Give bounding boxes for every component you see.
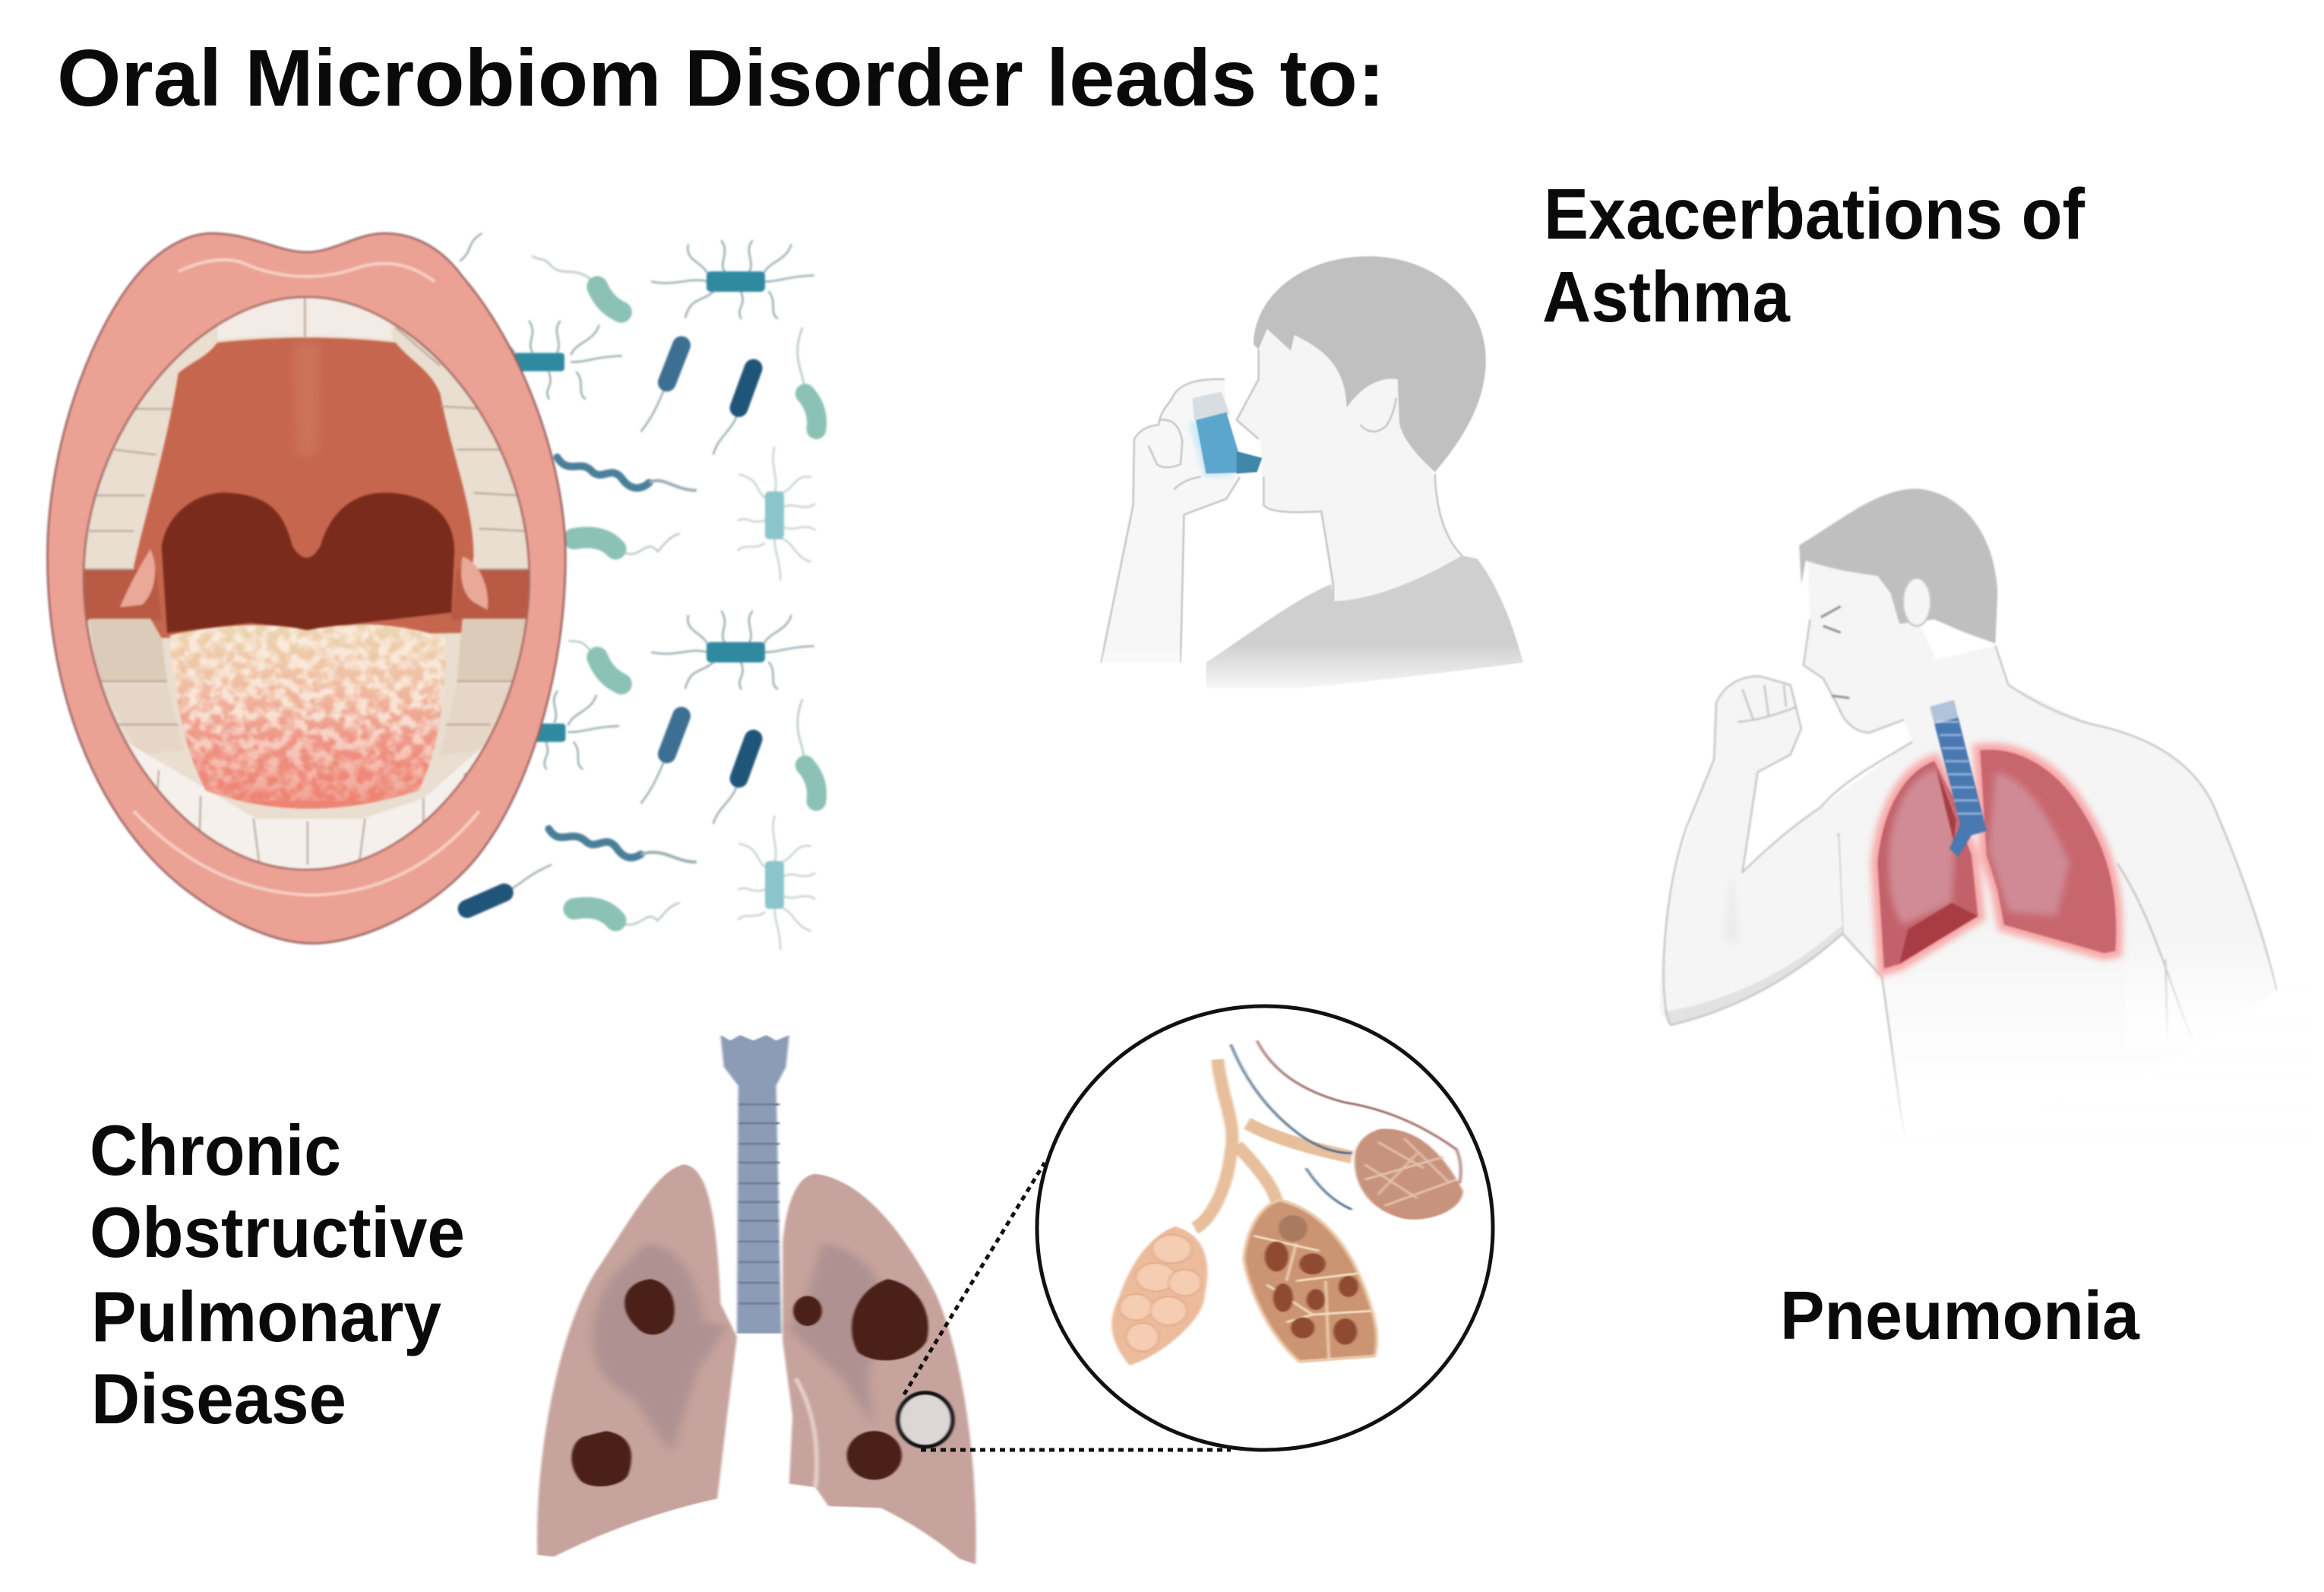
tongue bbox=[170, 625, 446, 809]
alveolar bubbles bbox=[1153, 1235, 1191, 1263]
heading: chronic obstructive pulmonary disease: Pulmonary bbox=[91, 1277, 441, 1356]
hair bbox=[1799, 489, 1997, 644]
cell contents bbox=[1265, 1215, 1358, 1345]
illustration: open mouth with oral bacteria bbox=[47, 233, 817, 949]
fade at bottom of figure bbox=[1877, 1038, 2313, 1147]
mouth interior bbox=[78, 292, 535, 872]
diseased alveolar sac bbox=[1244, 1200, 1377, 1362]
magnifier circle bbox=[1037, 1006, 1493, 1450]
heading: pneumonia: Pneumonia bbox=[1780, 1278, 2140, 1354]
tonsils bbox=[120, 549, 155, 607]
heading: exacerbations of asthma: Asthma bbox=[1542, 257, 1791, 337]
torso bbox=[1743, 646, 2277, 1134]
upper and lower teeth base bbox=[84, 298, 529, 820]
magnified spot bbox=[898, 1393, 953, 1447]
lower molars bbox=[89, 619, 167, 682]
tongue pink wash bbox=[182, 694, 441, 802]
dotted connector lines bbox=[904, 1163, 1231, 1450]
illustration: person using an inhaler bbox=[1084, 256, 1538, 698]
facial features bbox=[1821, 606, 1849, 698]
lips bbox=[47, 233, 565, 944]
blood vessels bbox=[1231, 1044, 1352, 1210]
arm and hand bbox=[1101, 379, 1240, 663]
ear bbox=[1903, 578, 1930, 626]
cell walls bbox=[1254, 1236, 1371, 1359]
lip highlights bbox=[134, 260, 479, 895]
throat bbox=[162, 492, 454, 633]
inhaler bbox=[1189, 392, 1262, 476]
trachea top fade bbox=[1930, 700, 1959, 724]
fade at bottom of figure bbox=[1084, 644, 1538, 698]
arm bbox=[1659, 676, 1843, 1025]
upper incisors bbox=[217, 298, 393, 340]
tumours bbox=[571, 1279, 928, 1486]
heading: exacerbations of asthma bbox=[1542, 174, 2085, 337]
left lung bbox=[537, 1164, 737, 1557]
hair bbox=[1254, 256, 1486, 472]
right lung bbox=[1980, 750, 2116, 953]
capillary alveolar sac bbox=[1355, 1128, 1463, 1220]
illustration: lungs with dark lesions bbox=[537, 1035, 976, 1565]
lower incisors bbox=[128, 743, 483, 869]
heading: chronic obstructive pulmonary disease bbox=[90, 1110, 465, 1438]
inhaler body bbox=[1196, 412, 1262, 473]
title: Oral Microbiom Disorder leads to: bbox=[57, 33, 1385, 123]
bacterium: top tail bbox=[460, 233, 482, 261]
cheeks bbox=[81, 569, 162, 620]
heading: chronic obstructive pulmonary disease: Chronic bbox=[90, 1110, 341, 1190]
healthy alveolar sac bbox=[1111, 1226, 1207, 1366]
right lung bbox=[783, 1174, 976, 1565]
palate shading bbox=[296, 345, 318, 453]
heading: chronic obstructive pulmonary disease: Disease bbox=[91, 1359, 346, 1438]
inhaler glow bbox=[1189, 417, 1233, 476]
bacteria cloud bbox=[457, 233, 817, 949]
left lung bbox=[1877, 761, 1978, 968]
head bbox=[1804, 561, 1934, 733]
torso outline bbox=[1821, 646, 2277, 1134]
trachea bbox=[720, 1035, 789, 1334]
inhaler cap bbox=[1193, 392, 1230, 420]
bronchi bbox=[1195, 1059, 1352, 1228]
heading: chronic obstructive pulmonary disease: Obstructive bbox=[90, 1192, 465, 1272]
shirt bbox=[1206, 555, 1523, 688]
lung fissure bbox=[795, 1378, 817, 1487]
airway shadows bbox=[592, 1243, 727, 1454]
tongue coating speckle bbox=[164, 623, 451, 801]
lung glow bbox=[1877, 750, 2116, 968]
trachea bbox=[1930, 700, 1987, 857]
palate bbox=[134, 337, 473, 638]
tooth separators bbox=[84, 298, 530, 569]
face and neck bbox=[1237, 307, 1462, 601]
illustration: man coughing with inflamed lungs bbox=[1659, 489, 2313, 1147]
ear bbox=[1358, 378, 1396, 433]
inner lip edge bbox=[84, 297, 530, 869]
heading: exacerbations of asthma: Exacerbations of bbox=[1544, 174, 2085, 255]
foreground bacterium bbox=[467, 865, 552, 909]
illustration: alveoli detail bbox=[1111, 1040, 1463, 1366]
